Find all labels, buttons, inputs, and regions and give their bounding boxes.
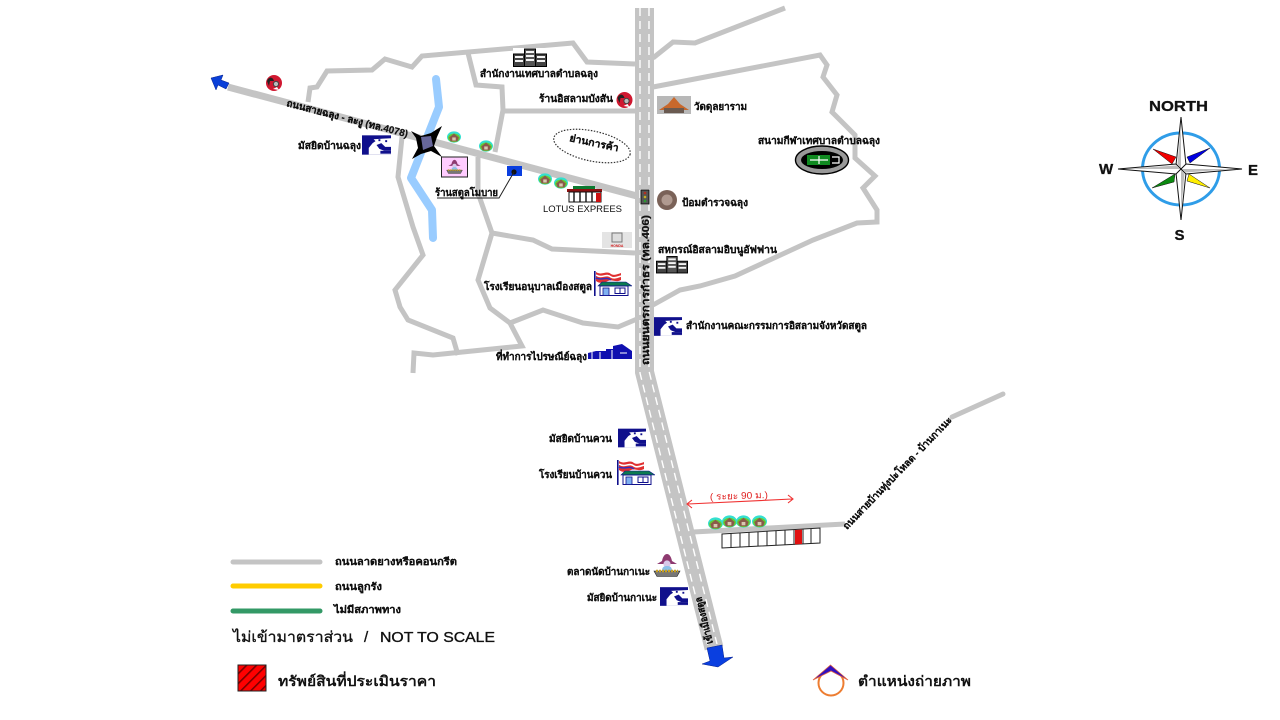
map labels: ตลาดนัดบ้านกาเนะ <box>567 566 650 578</box>
not to scale note: / <box>364 629 369 646</box>
distance arrow <box>687 490 793 508</box>
northern roads <box>308 43 635 102</box>
map labels: ถนนสายฉลุง - ละงู (ทล.4078) <box>285 98 409 141</box>
map labels: สำนักงานคณะกรรมการอิสลามจังหวัดสตูล <box>686 320 867 333</box>
icon: cooperative office <box>656 256 688 273</box>
star points <box>1118 117 1242 220</box>
compass labels <box>1099 98 1258 244</box>
map labels: LOTUS EXPREES <box>543 204 622 215</box>
compass labels: S <box>1174 227 1185 244</box>
compass labels: E <box>1248 162 1258 179</box>
commercial district ellipse <box>551 123 633 169</box>
icon: stadium <box>796 146 848 174</box>
map labels: มัสยิดบ้านฉลุง <box>298 140 361 152</box>
map labels: วัดดุลยาราม <box>694 101 747 113</box>
icon: Ban Kanae market <box>654 554 680 576</box>
map labels: ร้านอิสลามบังสัน <box>539 93 613 105</box>
legend: photo position: ตำแหน่งถ่ายภาพ <box>858 673 971 689</box>
icon: Ban Khuan school <box>617 460 655 485</box>
compass <box>1099 98 1258 244</box>
arrow: to Lalung west <box>211 75 229 90</box>
legend: appraised property: ทรัพย์สินที่ประเมินราคา <box>278 671 436 689</box>
icon: market framed <box>442 157 468 177</box>
legend: laterite road: ถนนลูกรัง <box>335 581 382 594</box>
map labels: โรงเรียนอนุบาลเมืองสตูล <box>483 280 592 294</box>
icon: temple <box>657 96 691 114</box>
arrow: to Satun south <box>702 645 733 667</box>
not to scale note <box>232 628 495 646</box>
map labels: สำนักงานเทศบาลตำบลฉลุง <box>480 68 598 80</box>
map labels <box>285 68 955 645</box>
icon: mobile shop with leader line <box>437 166 522 198</box>
not to scale note: NOT TO SCALE <box>380 629 495 646</box>
not to scale note: ไม่เข้ามาตราส่วน <box>232 628 353 646</box>
map labels: ป้อมตำรวจฉลุง <box>682 197 748 209</box>
icon: Lotus Express <box>567 186 602 202</box>
icon: municipal office <box>513 48 547 67</box>
legend <box>232 556 971 696</box>
distance arrow: ( ระยะ 90 ม.) <box>710 490 768 503</box>
icon: mosque Ban Khuan <box>618 429 646 447</box>
compass labels: W <box>1099 161 1114 178</box>
eastern roads <box>653 8 785 58</box>
legend: appraised property <box>238 665 436 691</box>
coloured points <box>1152 148 1210 188</box>
icon: Islamic committee office <box>654 317 682 336</box>
houses <box>447 131 767 530</box>
icon: Honda dealer <box>602 232 632 248</box>
river <box>411 79 439 238</box>
map labels: เข้าเมืองสตูล <box>693 595 717 645</box>
compass ring <box>1142 133 1220 205</box>
legend: no road condition: ไม่มีสภาพทาง <box>333 603 401 616</box>
legend: paved road: ถนนลาดยางหรือคอนกรีต <box>335 556 457 568</box>
icon: mosque Chalung <box>362 135 391 155</box>
map labels: ที่ทำการไปรษณีย์ฉลุง <box>496 349 587 363</box>
map labels: โรงเรียนบ้านควน <box>538 468 612 481</box>
icon: restaurant west <box>266 75 282 91</box>
icon: restaurant Bang San <box>616 92 632 108</box>
west highway 4078 <box>228 87 637 196</box>
map labels: มัสยิดบ้านกาเนะ <box>587 592 657 604</box>
icon: mosque Ban Kanae <box>660 587 688 606</box>
icon: traffic light <box>640 189 650 205</box>
icon: kindergarten school <box>594 271 632 296</box>
map labels: ถนนสายบ้านทุ่งปะโหลด - บ้านกาเนะ <box>840 414 955 532</box>
map labels: ร้านสตูลโมบาย <box>435 186 498 200</box>
map labels: สหกรณ์อิสลามอิบนูอัฟฟาน <box>658 244 777 257</box>
icon: Honda dealer: HONDA <box>611 244 624 248</box>
western side roads <box>395 137 458 355</box>
icon: police badge <box>657 190 677 210</box>
icon: post office <box>588 344 632 359</box>
star shading <box>1126 125 1234 212</box>
road network <box>228 8 1003 532</box>
main road 406 <box>640 8 717 648</box>
bridge icon <box>411 126 442 159</box>
legend: photo position <box>813 665 971 696</box>
south-east road <box>693 524 845 532</box>
map labels: มัสยิดบ้านควน <box>549 433 612 445</box>
compass labels: NORTH <box>1149 98 1208 115</box>
subject plots row <box>722 528 820 548</box>
commercial district ellipse: ย่านการค้า <box>568 132 620 154</box>
map labels: ถนนยนตรการกำธร (ทล.406) <box>640 215 652 365</box>
map labels: สนามกีฬาเทศบาลตำบลฉลุง <box>758 135 880 147</box>
